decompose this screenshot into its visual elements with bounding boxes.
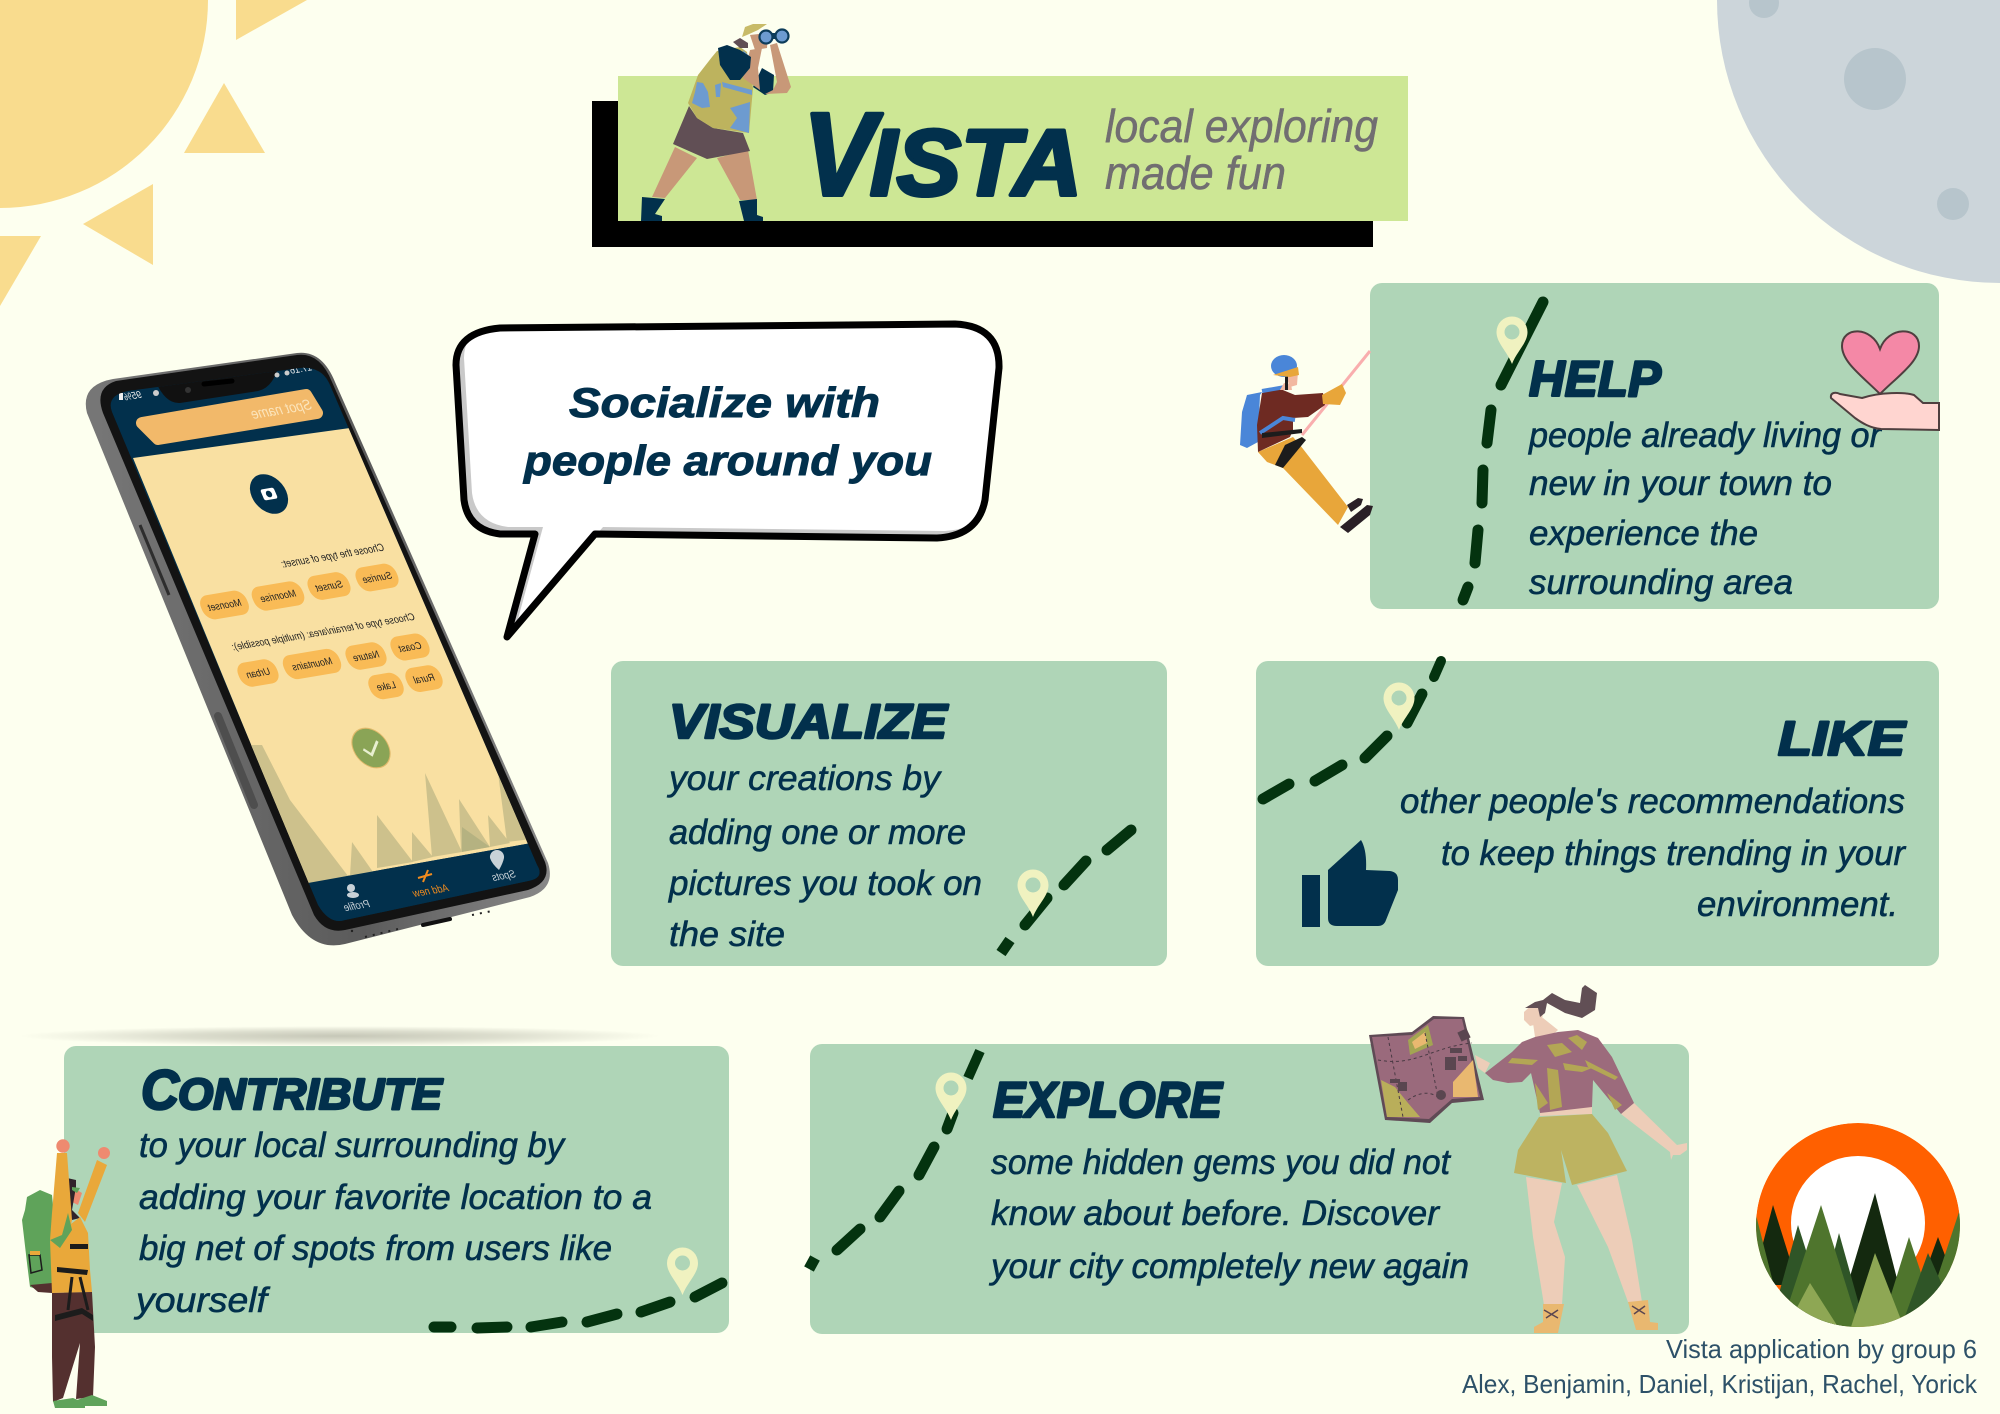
map pin (1018, 870, 1048, 917)
body text: to keep things trending in your (1441, 834, 1906, 873)
chip: Moonset (200, 590, 249, 620)
spot name field: Spot name (247, 396, 314, 422)
icon: thumbs up (1302, 840, 1398, 927)
heading (141, 1058, 444, 1121)
spot name field (142, 395, 317, 439)
bubble text (523, 379, 932, 484)
moon (1717, 0, 2000, 283)
icon: heart in hand (1831, 331, 1939, 430)
notch (158, 371, 277, 403)
chip: Sunrise: Sunrise (360, 570, 394, 586)
body text: know about before. Discover (991, 1194, 1440, 1233)
chip: Sunset: Sunset (313, 579, 345, 595)
logo (1756, 1123, 1960, 1327)
body text (989, 1143, 1469, 1286)
camera button (250, 474, 288, 514)
body text: adding one or more (669, 813, 966, 852)
chip: Lake (368, 672, 404, 700)
chip: Nature (345, 642, 387, 670)
title: Vista: V (803, 89, 883, 221)
chip: Coast: Coast (396, 640, 424, 655)
body text: pictures you took on (668, 864, 982, 903)
nav: add new: Add new (410, 883, 451, 900)
map pin (1384, 682, 1414, 730)
illustration: woman with map (1369, 985, 1687, 1333)
chip: Moonrise (252, 581, 304, 611)
body text: big net of spots from users like (139, 1229, 612, 1268)
body text: some hidden gems you did not (991, 1143, 1451, 1182)
illustration: hiker with binoculars (641, 24, 791, 221)
screen mountains (250, 745, 540, 884)
nav: profile: Profile (341, 899, 372, 914)
chip: Rural: Rural (412, 672, 437, 687)
body text: to your local surrounding by (139, 1126, 566, 1165)
phone ports (365, 911, 492, 937)
body text: experience the (1529, 514, 1758, 553)
tagline (1105, 100, 1378, 199)
nav: spots (490, 850, 516, 881)
illustration: backpacker (22, 1139, 110, 1408)
map pin (1496, 316, 1528, 364)
chip: Mountains (282, 648, 342, 680)
heading: C (141, 1058, 180, 1121)
route line (1463, 302, 1543, 600)
heading: VISUALIZE (669, 696, 949, 749)
footer credits: Alex, Benjamin, Daniel, Kristijan, Rachel, Yorick (1462, 1369, 1978, 1399)
body text: yourself (134, 1281, 270, 1320)
panel: help (1370, 283, 1939, 609)
heading: LIKE (1778, 713, 1907, 766)
chip: Urban (237, 659, 279, 687)
body text (1528, 416, 1882, 602)
chip: Moonrise: Moonrise (258, 588, 298, 605)
map pin (667, 1248, 698, 1295)
footer credits: Vista application by group 6 (1666, 1334, 1977, 1364)
body text: people already living or (1528, 416, 1882, 455)
body text: adding your favorite location to a (139, 1178, 652, 1217)
route line (809, 1051, 980, 1269)
body text (134, 1126, 652, 1320)
body text (667, 759, 982, 954)
route line (1001, 830, 1131, 953)
speech bubble (456, 317, 1007, 637)
status bar: 95% (122, 389, 144, 404)
chip: Lake: Lake (375, 680, 398, 694)
sun (0, 0, 307, 306)
status bar: 17:16 (288, 362, 314, 377)
tagline: local exploring (1105, 100, 1378, 152)
nav: profile (344, 884, 370, 911)
bubble text: Socialize with (569, 379, 880, 426)
screen (110, 368, 540, 921)
route line (434, 1283, 722, 1328)
panel: contribute (64, 1046, 729, 1333)
body text: your city completely new again (989, 1247, 1469, 1286)
route line (1263, 661, 1441, 799)
heading: EXPLORE (993, 1072, 1224, 1128)
chip: Sunset (308, 572, 350, 600)
panel: like (1256, 661, 1939, 966)
title: Vista (803, 89, 1082, 221)
chip: Urban: Urban (244, 666, 272, 681)
chip: Coast (390, 634, 430, 660)
body text: new in your town to (1529, 464, 1832, 503)
chip: Moonset: Moonset (206, 597, 244, 614)
chip: Mountains: Mountains (290, 656, 334, 674)
confirm button (351, 728, 391, 768)
illustration: phone (86, 350, 560, 950)
nav: add new (412, 870, 450, 897)
footer credits (1462, 1334, 1978, 1399)
title: Vista: ISTA (870, 110, 1082, 215)
paper map (1369, 1016, 1484, 1123)
illustration: climber (1240, 351, 1373, 533)
chip: Nature: Nature (351, 649, 382, 664)
tagline: made fun (1105, 147, 1286, 199)
chip: Rural (405, 665, 443, 692)
heading: ONTRIBUTE (178, 1070, 444, 1119)
chip: Sunrise (355, 564, 399, 592)
map pin (936, 1072, 966, 1120)
nav: spots: Spots (490, 869, 518, 884)
sunset label: Choose the type of sunset: (279, 542, 386, 571)
body text: surrounding area (1529, 563, 1793, 602)
body text (1400, 782, 1906, 924)
panel: explore (809, 1044, 1689, 1334)
panel: visualize (611, 661, 1167, 966)
nav bar (308, 844, 540, 921)
body text: other people's recommendations (1400, 782, 1905, 821)
body text: the site (669, 915, 785, 954)
status bar (119, 368, 312, 400)
body text: your creations by (667, 759, 943, 798)
heading: HELP (1529, 351, 1662, 407)
bubble text: people around you (523, 437, 932, 484)
body text: environment. (1697, 885, 1898, 924)
blurred shadow (20, 1026, 660, 1046)
terrain label: Choose type of terrain/area: (multiple possible): (230, 612, 417, 653)
title banner (592, 76, 1408, 247)
